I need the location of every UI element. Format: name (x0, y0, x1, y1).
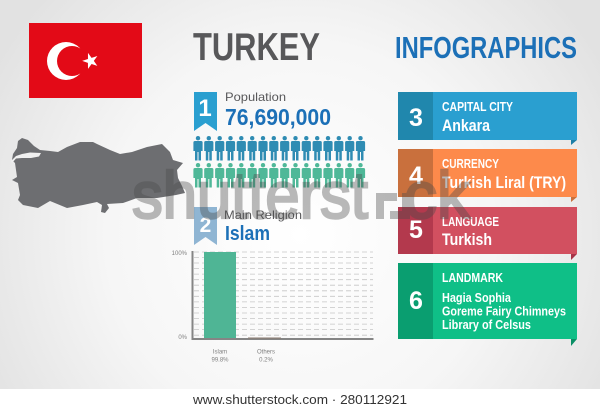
card 4: currency (398, 149, 577, 202)
pictogram: green row of people (193, 163, 365, 188)
category label Islam: Islam (213, 350, 227, 356)
card 6: landmark: LANDMARK (442, 270, 503, 285)
map of Turkey (11, 138, 185, 213)
card 5: language (398, 207, 577, 260)
ribbon badge 2: 2 (200, 214, 211, 237)
card 6: landmark (398, 263, 577, 346)
watermark: shutterst (132, 158, 368, 232)
card 5: language: Turkish (442, 231, 492, 249)
card 3: capital city (398, 92, 577, 145)
religion value: Islam (225, 223, 270, 245)
flag of Turkey (29, 23, 142, 98)
card 6: landmark: Goreme Fairy Chimneys (442, 304, 566, 318)
watermark: ck (404, 158, 471, 232)
section 2: religion heading (194, 207, 302, 245)
title: TURKEY: TURKEY (193, 26, 320, 69)
religion label: Main Religion (224, 208, 302, 222)
card 4: currency: 4 (409, 162, 423, 190)
bar: Islam (204, 252, 236, 338)
card 4: currency: CURRENCY (442, 156, 499, 171)
card 5: language: 5 (409, 216, 423, 244)
footer strip (0, 389, 600, 409)
pictogram: blue row of people (193, 136, 365, 160)
card 6: landmark: 6 (409, 287, 423, 315)
bar: Others (248, 338, 281, 339)
axis label 100%: 100% (172, 251, 188, 257)
card 3: capital city: Ankara (442, 117, 491, 135)
card 6: landmark: Library of Celsus (442, 317, 531, 332)
ribbon badge 1: 1 (198, 95, 212, 122)
card 4: currency: Turkish Liral (TRY) (442, 174, 566, 192)
card 6: landmark: Hagia Sophia (442, 290, 512, 305)
card 3: capital city: 3 (409, 104, 423, 132)
bar chart: religion share (172, 251, 374, 364)
section 1: population heading (194, 90, 331, 131)
population value: 76,690,000 (225, 104, 331, 130)
footer credit text: www.shutterstock.com · 280112921 (192, 392, 407, 407)
card 5: language: LANGUAGE (442, 214, 499, 229)
category label Islam: 99.8% (211, 358, 229, 364)
category label Others: 0.2% (259, 358, 273, 364)
card 3: capital city: CAPITAL CITY (442, 99, 513, 114)
category label Others: Others (257, 350, 275, 356)
population label: Population (225, 90, 286, 104)
axis label 0%: 0% (178, 335, 188, 341)
y axis and x axis (192, 251, 374, 339)
